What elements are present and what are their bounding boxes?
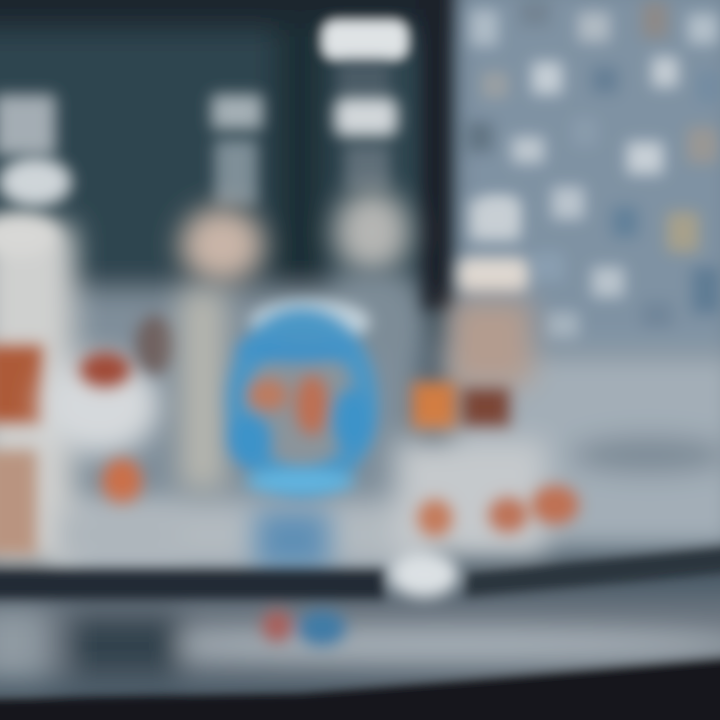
flask: blue sphere with orange contents — [226, 300, 378, 570]
dark vertical window frame — [420, 0, 452, 310]
bottle: tall centre left — [180, 95, 264, 490]
reflections on table — [262, 610, 346, 646]
white dish on table — [391, 553, 459, 597]
table area — [0, 350, 720, 680]
bottle: small left with red liquid — [40, 315, 180, 560]
dark foreground edge — [0, 655, 720, 720]
dark table rail — [0, 543, 720, 600]
bottle: far left — [0, 95, 75, 565]
background: dark teal wall — [0, 0, 460, 590]
bottle: right with amber liquid — [395, 200, 579, 555]
bottle: tall centre — [322, 20, 410, 355]
background: speckled right panel — [450, 0, 720, 360]
